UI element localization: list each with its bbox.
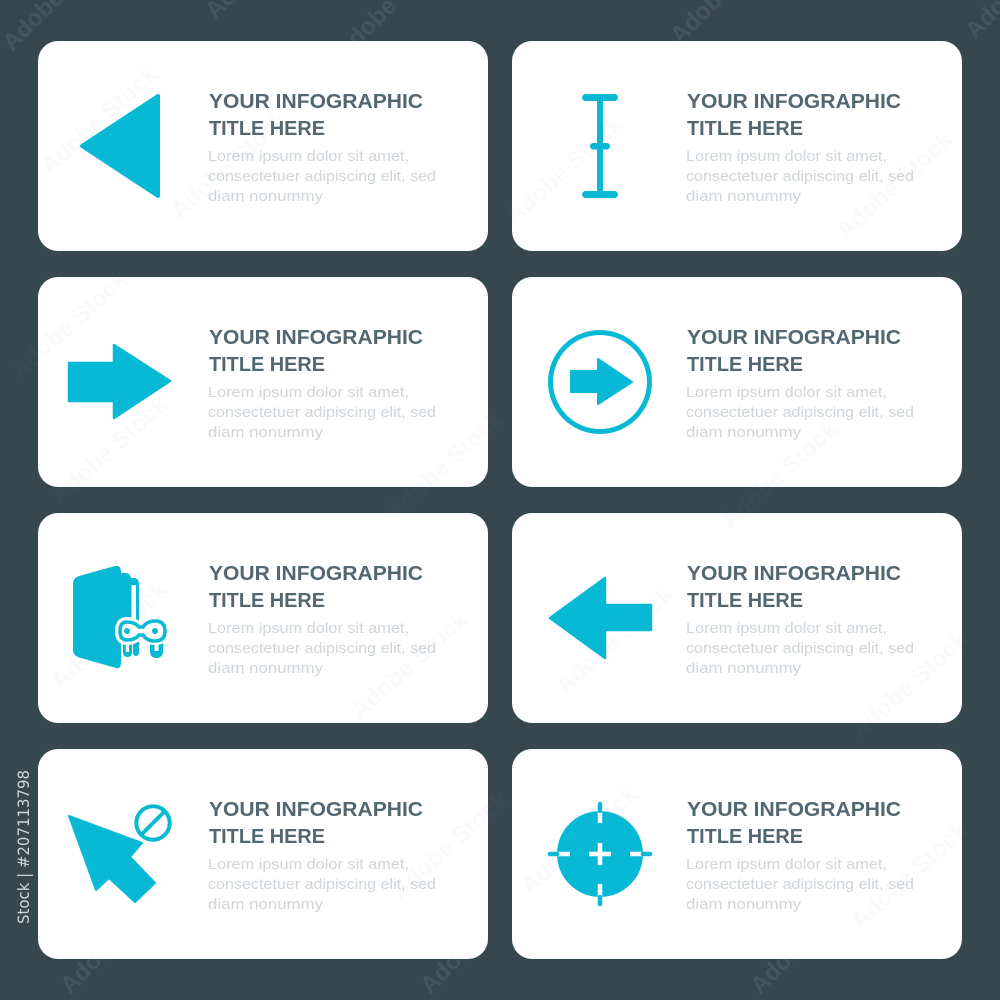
text block: card 1: diam nonummy xyxy=(208,188,324,205)
panel: card 5 xyxy=(38,513,488,723)
heading: card 4: TITLE HERE xyxy=(687,354,803,376)
text block: card 4: diam nonummy xyxy=(686,424,802,441)
text: Adobe Stock xyxy=(716,416,844,534)
text: Adobe Stock xyxy=(381,406,509,524)
text: Adobe Stock xyxy=(46,391,174,509)
text: Adobe Stock xyxy=(346,606,474,724)
text block: card 3: consectetuer adipiscing elit, sed xyxy=(208,404,436,421)
text block: card 7: Lorem ipsum dolor sit amet, xyxy=(208,856,409,873)
text block: card 5: consectetuer adipiscing elit, sed xyxy=(208,640,436,657)
icon: book with key xyxy=(73,566,165,668)
heading: card 3: YOUR INFOGRAPHIC xyxy=(209,327,423,349)
heading: card 5: YOUR INFOGRAPHIC xyxy=(209,563,423,585)
text: Adobe Stock xyxy=(36,61,164,179)
text: Adobe Stock xyxy=(551,581,679,699)
text block: card 6: diam nonummy xyxy=(686,660,802,677)
heading: card 2: YOUR INFOGRAPHIC xyxy=(687,91,901,113)
panel: card 3 xyxy=(38,277,488,487)
panel: card 2 xyxy=(512,41,962,251)
text: Adobe Stock xyxy=(846,816,974,934)
text block: card 4: consectetuer adipiscing elit, sed xyxy=(686,404,914,421)
panel: card 4 xyxy=(512,277,962,487)
text: Adobe Stock xyxy=(166,106,294,224)
heading: card 6: YOUR INFOGRAPHIC xyxy=(687,563,901,585)
heading: card 1: TITLE HERE xyxy=(209,118,325,140)
icon: right arrow xyxy=(69,345,170,418)
icon: left arrow xyxy=(550,578,651,658)
icon: cursor with prohibited sign xyxy=(69,806,170,902)
text: Adobe xyxy=(55,927,127,999)
text block: card 7: consectetuer adipiscing elit, sed xyxy=(208,876,436,893)
icon: crosshair target xyxy=(550,804,650,904)
icon: left triangle xyxy=(82,96,158,196)
text block: card 8: diam nonummy xyxy=(686,896,802,913)
text: Adobe Stock xyxy=(516,781,644,899)
text block: card 3: Lorem ipsum dolor sit amet, xyxy=(208,384,409,401)
text block: card 6: consectetuer adipiscing elit, sed xyxy=(686,640,914,657)
text: Adobe Stock xyxy=(846,626,974,744)
text: Adobe xyxy=(745,927,817,999)
text: Adobe Stock xyxy=(386,786,514,904)
text: Adobe xyxy=(415,927,487,999)
stock id label: Stock | #207113798 xyxy=(14,770,33,924)
text block: card 2: diam nonummy xyxy=(686,188,802,205)
panel: card 8 xyxy=(512,749,962,959)
text block: card 6: Lorem ipsum dolor sit amet, xyxy=(686,620,887,637)
heading: card 4: YOUR INFOGRAPHIC xyxy=(687,327,901,349)
heading: card 8: TITLE HERE xyxy=(687,826,803,848)
heading: card 8: YOUR INFOGRAPHIC xyxy=(687,799,901,821)
text block: card 1: consectetuer adipiscing elit, sed xyxy=(208,168,436,185)
text block: card 5: diam nonummy xyxy=(208,660,324,677)
heading: card 5: TITLE HERE xyxy=(209,590,325,612)
text block: card 7: diam nonummy xyxy=(208,896,324,913)
text block: card 8: Lorem ipsum dolor sit amet, xyxy=(686,856,887,873)
heading: card 3: TITLE HERE xyxy=(209,354,325,376)
heading: card 7: YOUR INFOGRAPHIC xyxy=(209,799,423,821)
heading: card 6: TITLE HERE xyxy=(687,590,803,612)
text block: card 3: diam nonummy xyxy=(208,424,324,441)
heading: card 1: YOUR INFOGRAPHIC xyxy=(209,91,423,113)
text: Adobe Stock xyxy=(501,111,629,229)
heading: card 7: TITLE HERE xyxy=(209,826,325,848)
icon: circled right arrow xyxy=(550,332,650,432)
text: Adobe Stock xyxy=(831,126,959,244)
text block: card 2: Lorem ipsum dolor sit amet, xyxy=(686,148,887,165)
text block: card 8: consectetuer adipiscing elit, sed xyxy=(686,876,914,893)
panel: card 1 xyxy=(38,41,488,251)
text block: card 5: Lorem ipsum dolor sit amet, xyxy=(208,620,409,637)
icon: text cursor xyxy=(582,94,618,198)
text block: card 1: Lorem ipsum dolor sit amet, xyxy=(208,148,409,165)
panel: card 6 xyxy=(512,513,962,723)
text block: card 2: consectetuer adipiscing elit, sed xyxy=(686,168,914,185)
text: Adobe Stock xyxy=(46,576,174,694)
panel: card 7 xyxy=(38,749,488,959)
text block: card 4: Lorem ipsum dolor sit amet, xyxy=(686,384,887,401)
heading: card 2: TITLE HERE xyxy=(687,118,803,140)
text: Adobe Stock xyxy=(6,266,134,384)
